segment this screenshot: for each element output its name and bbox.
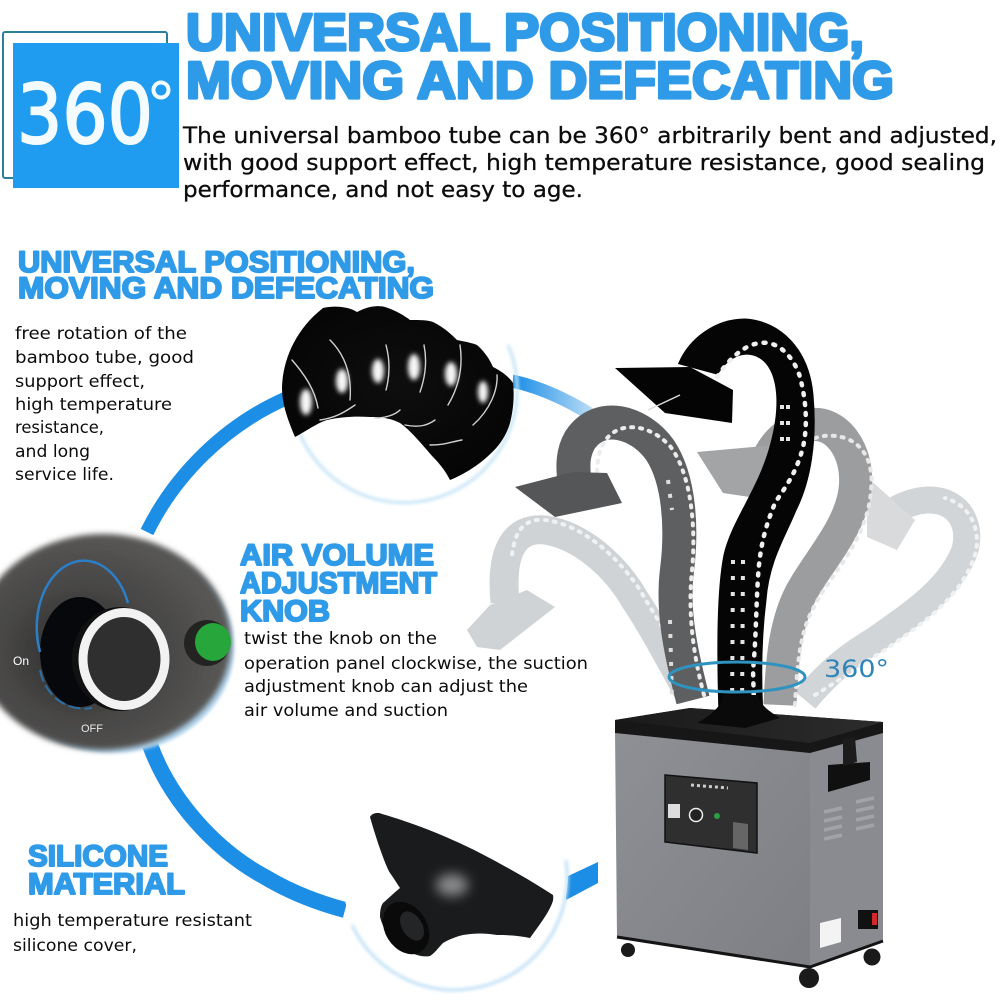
intro text: The universal bamboo tube can be 360° arbitrarily bent and adjusted, — [182, 123, 997, 149]
text: tube description: free rotation of the — [15, 324, 187, 343]
sub-heading: silicone material — [28, 840, 185, 901]
text: knob description: air volume and suction — [244, 701, 448, 720]
fume extractor cabinet — [615, 695, 883, 988]
text: tube description: support effect, — [15, 372, 145, 391]
360 degree badge — [3, 32, 179, 188]
sub-heading: air volume knob — [240, 539, 437, 628]
360 degree badge: 360 — [17, 68, 153, 163]
text: tube description: high temperature — [15, 395, 172, 414]
intro text — [182, 123, 997, 203]
cabinet side — [810, 732, 883, 967]
text: silicone description — [13, 911, 253, 955]
bottom edge — [617, 937, 883, 967]
360 rotation arrow: 360° — [824, 655, 889, 683]
white circle: tube close-up — [282, 267, 517, 503]
knob close-up disc — [0, 534, 234, 753]
intro text: with good support effect, high temperature resistance, good sealing — [183, 150, 985, 176]
power switch — [858, 910, 878, 929]
text: tube description: and long — [15, 442, 90, 461]
text: silicone description: silicone cover, — [13, 936, 137, 955]
green button — [184, 620, 231, 666]
text: knob description — [244, 629, 588, 720]
main heading: UNIVERSAL POSITIONING, — [186, 4, 864, 62]
360 rotation arrow — [669, 655, 889, 692]
ghost tube: far right — [805, 477, 977, 700]
sub-heading: universal positioning — [18, 246, 434, 305]
text: tube description: bamboo tube, good — [15, 348, 194, 367]
main heading — [186, 4, 894, 110]
knob close-up disc: OFF — [81, 723, 103, 735]
sub-heading: silicone material: MATERIAL — [28, 868, 185, 901]
text: tube description: resistance, — [15, 418, 104, 437]
icon: silicone nozzle — [370, 813, 553, 963]
cabinet front — [615, 730, 810, 967]
text: silicone description: high temperature resistant — [13, 911, 253, 930]
ghost tube: far left — [467, 520, 695, 695]
side handle — [828, 762, 870, 792]
wheels — [621, 943, 635, 957]
blue circular arc — [147, 381, 605, 910]
white circle: silicone nozzle close-up — [342, 762, 568, 990]
sub-heading: air volume knob: KNOB — [240, 595, 330, 628]
cabinet lid — [615, 708, 883, 753]
side vents — [824, 798, 874, 839]
sub-heading: air volume knob: ADJUSTMENT — [240, 567, 437, 600]
knob — [72, 607, 168, 711]
control panel — [665, 775, 757, 853]
text: tube description — [15, 324, 194, 484]
knob close-up disc: On — [13, 654, 29, 668]
intro text: performance, and not easy to age. — [183, 177, 583, 203]
main nozzle — [615, 367, 733, 423]
text: tube description: service life. — [15, 465, 114, 484]
label sticker — [820, 918, 841, 948]
main black tube — [615, 320, 813, 715]
icon: black corrugated tube — [282, 306, 514, 480]
main heading: MOVING AND DEFECATING — [186, 52, 894, 110]
text: knob description: operation panel clockwise, the suction — [244, 654, 588, 673]
sub-heading: air volume knob: AIR VOLUME — [240, 539, 434, 572]
text: knob description: adjustment knob can adjust the — [244, 677, 528, 696]
tube base — [697, 695, 780, 728]
sub-heading: universal positioning: MOVING AND DEFECATING — [18, 272, 434, 305]
ghost tube: mid left — [515, 422, 704, 700]
ghost tube: mid right — [697, 424, 872, 705]
sub-heading: silicone material: SILICONE — [28, 840, 168, 873]
text: knob description: twist the knob on the — [244, 629, 437, 648]
sub-heading: universal positioning: UNIVERSAL POSITIONING, — [18, 246, 415, 279]
